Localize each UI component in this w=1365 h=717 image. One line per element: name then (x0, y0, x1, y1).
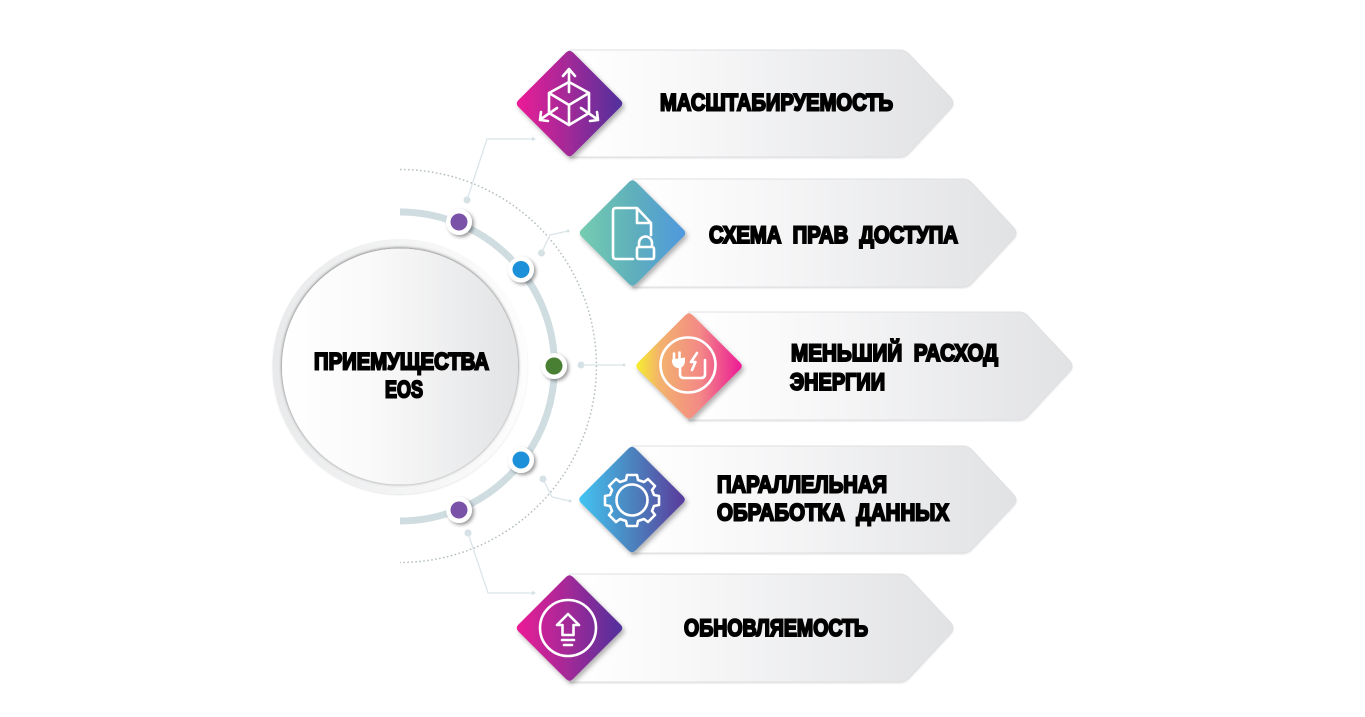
connector: bottom (464, 530, 536, 595)
connector: middle (578, 362, 626, 368)
node: blue bottom (508, 447, 534, 473)
label: ПАРАЛЛЕЛЬНАЯ (717, 472, 887, 498)
label: СХЕМА ПРАВ ДОСТУПА (709, 222, 958, 249)
label: ОБРАБОТКА ДАННЫХ (717, 500, 949, 526)
central circle (272, 239, 528, 494)
icon: plug (636, 313, 742, 419)
panel: access scheme (580, 179, 1016, 287)
panel: parallel processing (579, 446, 1016, 553)
connector: second (538, 230, 570, 256)
icon: gear (579, 447, 685, 552)
label: МЕНЬШИЙ РАСХОД (791, 339, 998, 367)
node: purple top (446, 209, 472, 235)
node: green (541, 353, 567, 379)
central title: EOS (385, 376, 423, 404)
connector: top (464, 137, 536, 204)
central title: ПРИЕМУЩЕСТВА (314, 348, 489, 376)
node: purple bottom (446, 497, 472, 523)
label: ОБНОВЛЯЕМОСТЬ (684, 615, 868, 642)
label (790, 339, 998, 396)
panel: upgradability (517, 574, 953, 682)
panel: lower energy use (636, 312, 1072, 420)
label (717, 472, 949, 526)
node: blue top (508, 256, 534, 282)
connector: fourth (540, 476, 572, 502)
label: ЭНЕРГИИ (790, 369, 885, 396)
icon: document lock (580, 180, 685, 286)
central title (314, 348, 489, 404)
label: МАСШТАБИРУЕМОСТЬ (660, 90, 893, 116)
panel: scalability (517, 50, 953, 157)
icon: cube (517, 51, 622, 156)
icon: upload arrow (517, 575, 622, 681)
thick arc (400, 212, 554, 521)
dotted arc (400, 170, 596, 562)
